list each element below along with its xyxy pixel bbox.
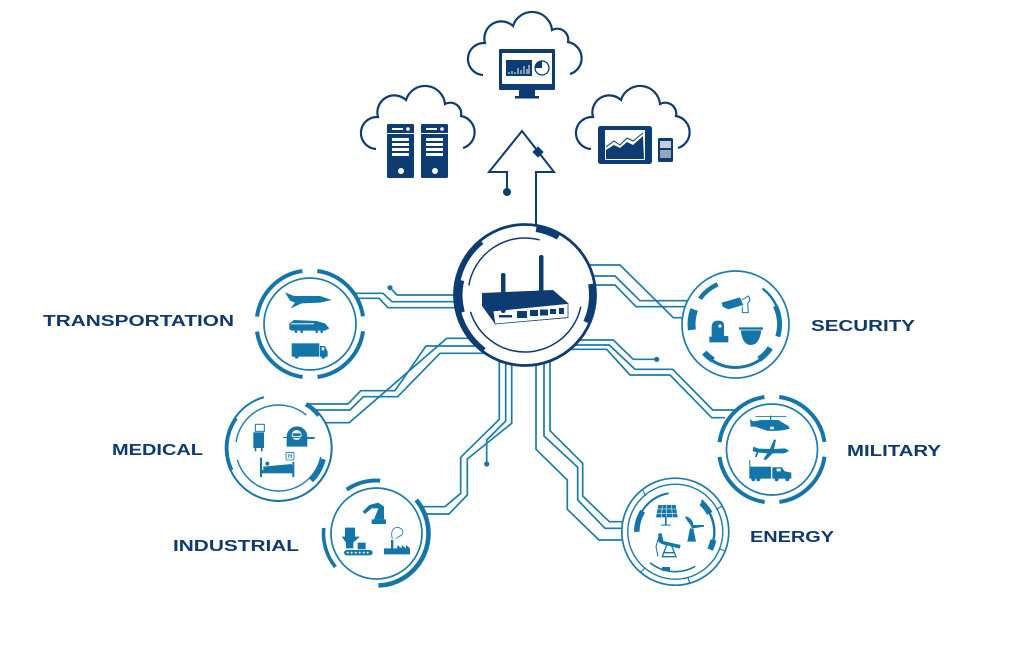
panel: medical xyxy=(206,375,352,521)
label: energy: ENERGY xyxy=(750,529,834,546)
energy icons xyxy=(656,505,704,557)
circuit traces: transportation xyxy=(355,285,465,308)
military icons xyxy=(749,416,791,481)
circuit traces: security xyxy=(575,265,688,318)
upload arrow xyxy=(489,131,554,226)
industrial icons xyxy=(342,503,410,555)
transportation icons xyxy=(285,292,332,359)
medical icons xyxy=(253,424,315,477)
circuit traces: energy xyxy=(536,350,623,540)
circuit traces: military xyxy=(560,340,735,418)
cloud with tablet and phone xyxy=(576,86,690,164)
circuit traces: industrial xyxy=(423,350,512,514)
router device xyxy=(482,255,568,324)
label: industrial: INDUSTRIAL xyxy=(173,538,299,555)
label: transportation: TRANSPORTATION xyxy=(43,313,234,330)
panel: security xyxy=(672,261,799,388)
security icons xyxy=(709,296,763,345)
panel: transportation xyxy=(250,264,370,384)
label: security: SECURITY xyxy=(811,318,915,335)
cloud with monitor xyxy=(468,12,582,98)
cloud with servers xyxy=(361,86,475,178)
central gateway hub xyxy=(429,199,621,391)
label: military: MILITARY xyxy=(847,443,941,460)
panel: industrial xyxy=(302,459,451,608)
label: medical: MEDICAL xyxy=(112,442,203,459)
panel: military xyxy=(712,390,832,509)
panel: energy xyxy=(620,477,730,587)
circuit traces: medical xyxy=(308,338,500,423)
medical icons: H xyxy=(288,454,292,460)
